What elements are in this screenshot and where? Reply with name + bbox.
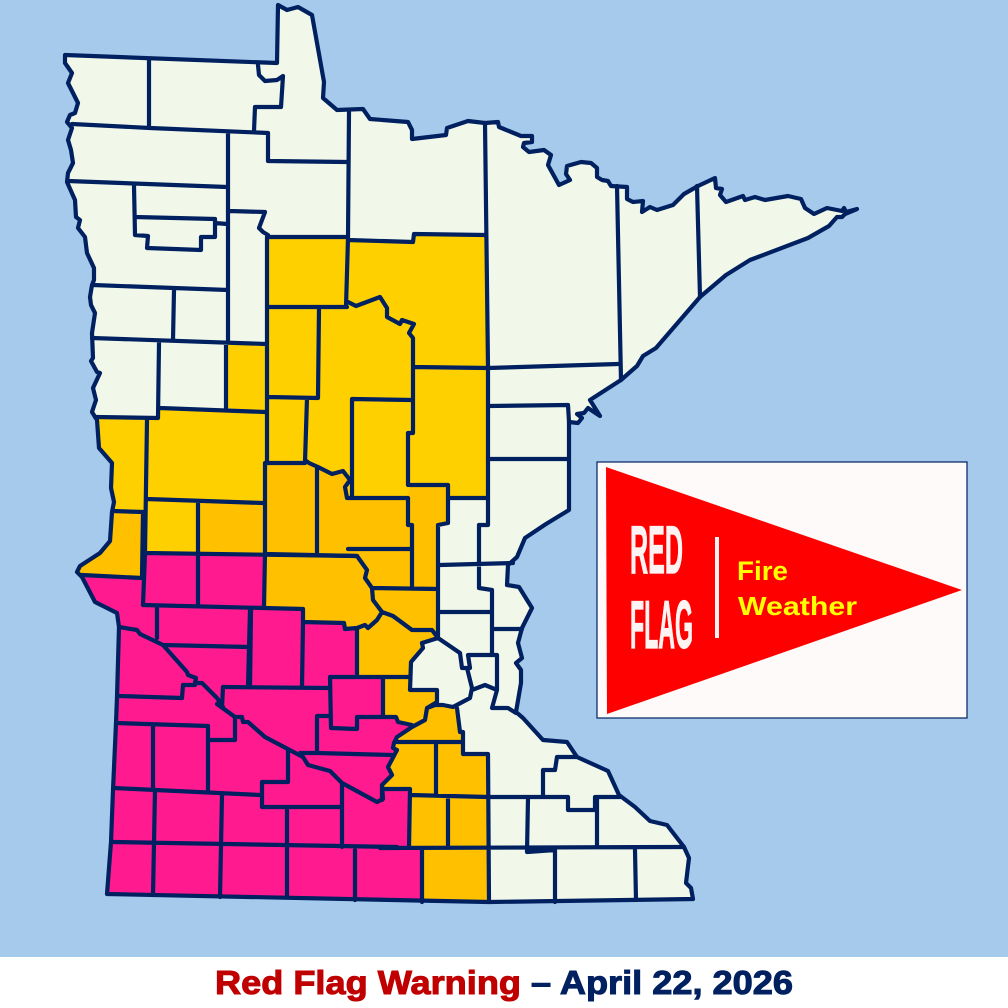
warning zone: yellow counties <box>95 234 488 553</box>
pennant divider <box>715 537 719 638</box>
title text: Red Flag Warning – April 22, 2026 <box>215 964 793 1001</box>
warning zone: pink counties <box>82 553 422 902</box>
icon: red pennant <box>606 467 962 714</box>
state outline <box>65 5 857 902</box>
text: Weather: Weather <box>738 591 857 621</box>
title band <box>0 957 1008 1008</box>
text: Fire: Fire <box>737 556 788 586</box>
county boundaries <box>68 60 700 525</box>
legend panel: red flag pennant <box>597 462 967 718</box>
legend panel: red flag pennant: FLAG <box>630 587 693 663</box>
state base: unaffected counties <box>65 5 857 902</box>
warning zone: orange counties <box>77 460 489 902</box>
legend box <box>597 462 967 718</box>
map: Minnesota counties <box>65 5 857 902</box>
legend panel: red flag pennant: RED <box>630 512 683 588</box>
